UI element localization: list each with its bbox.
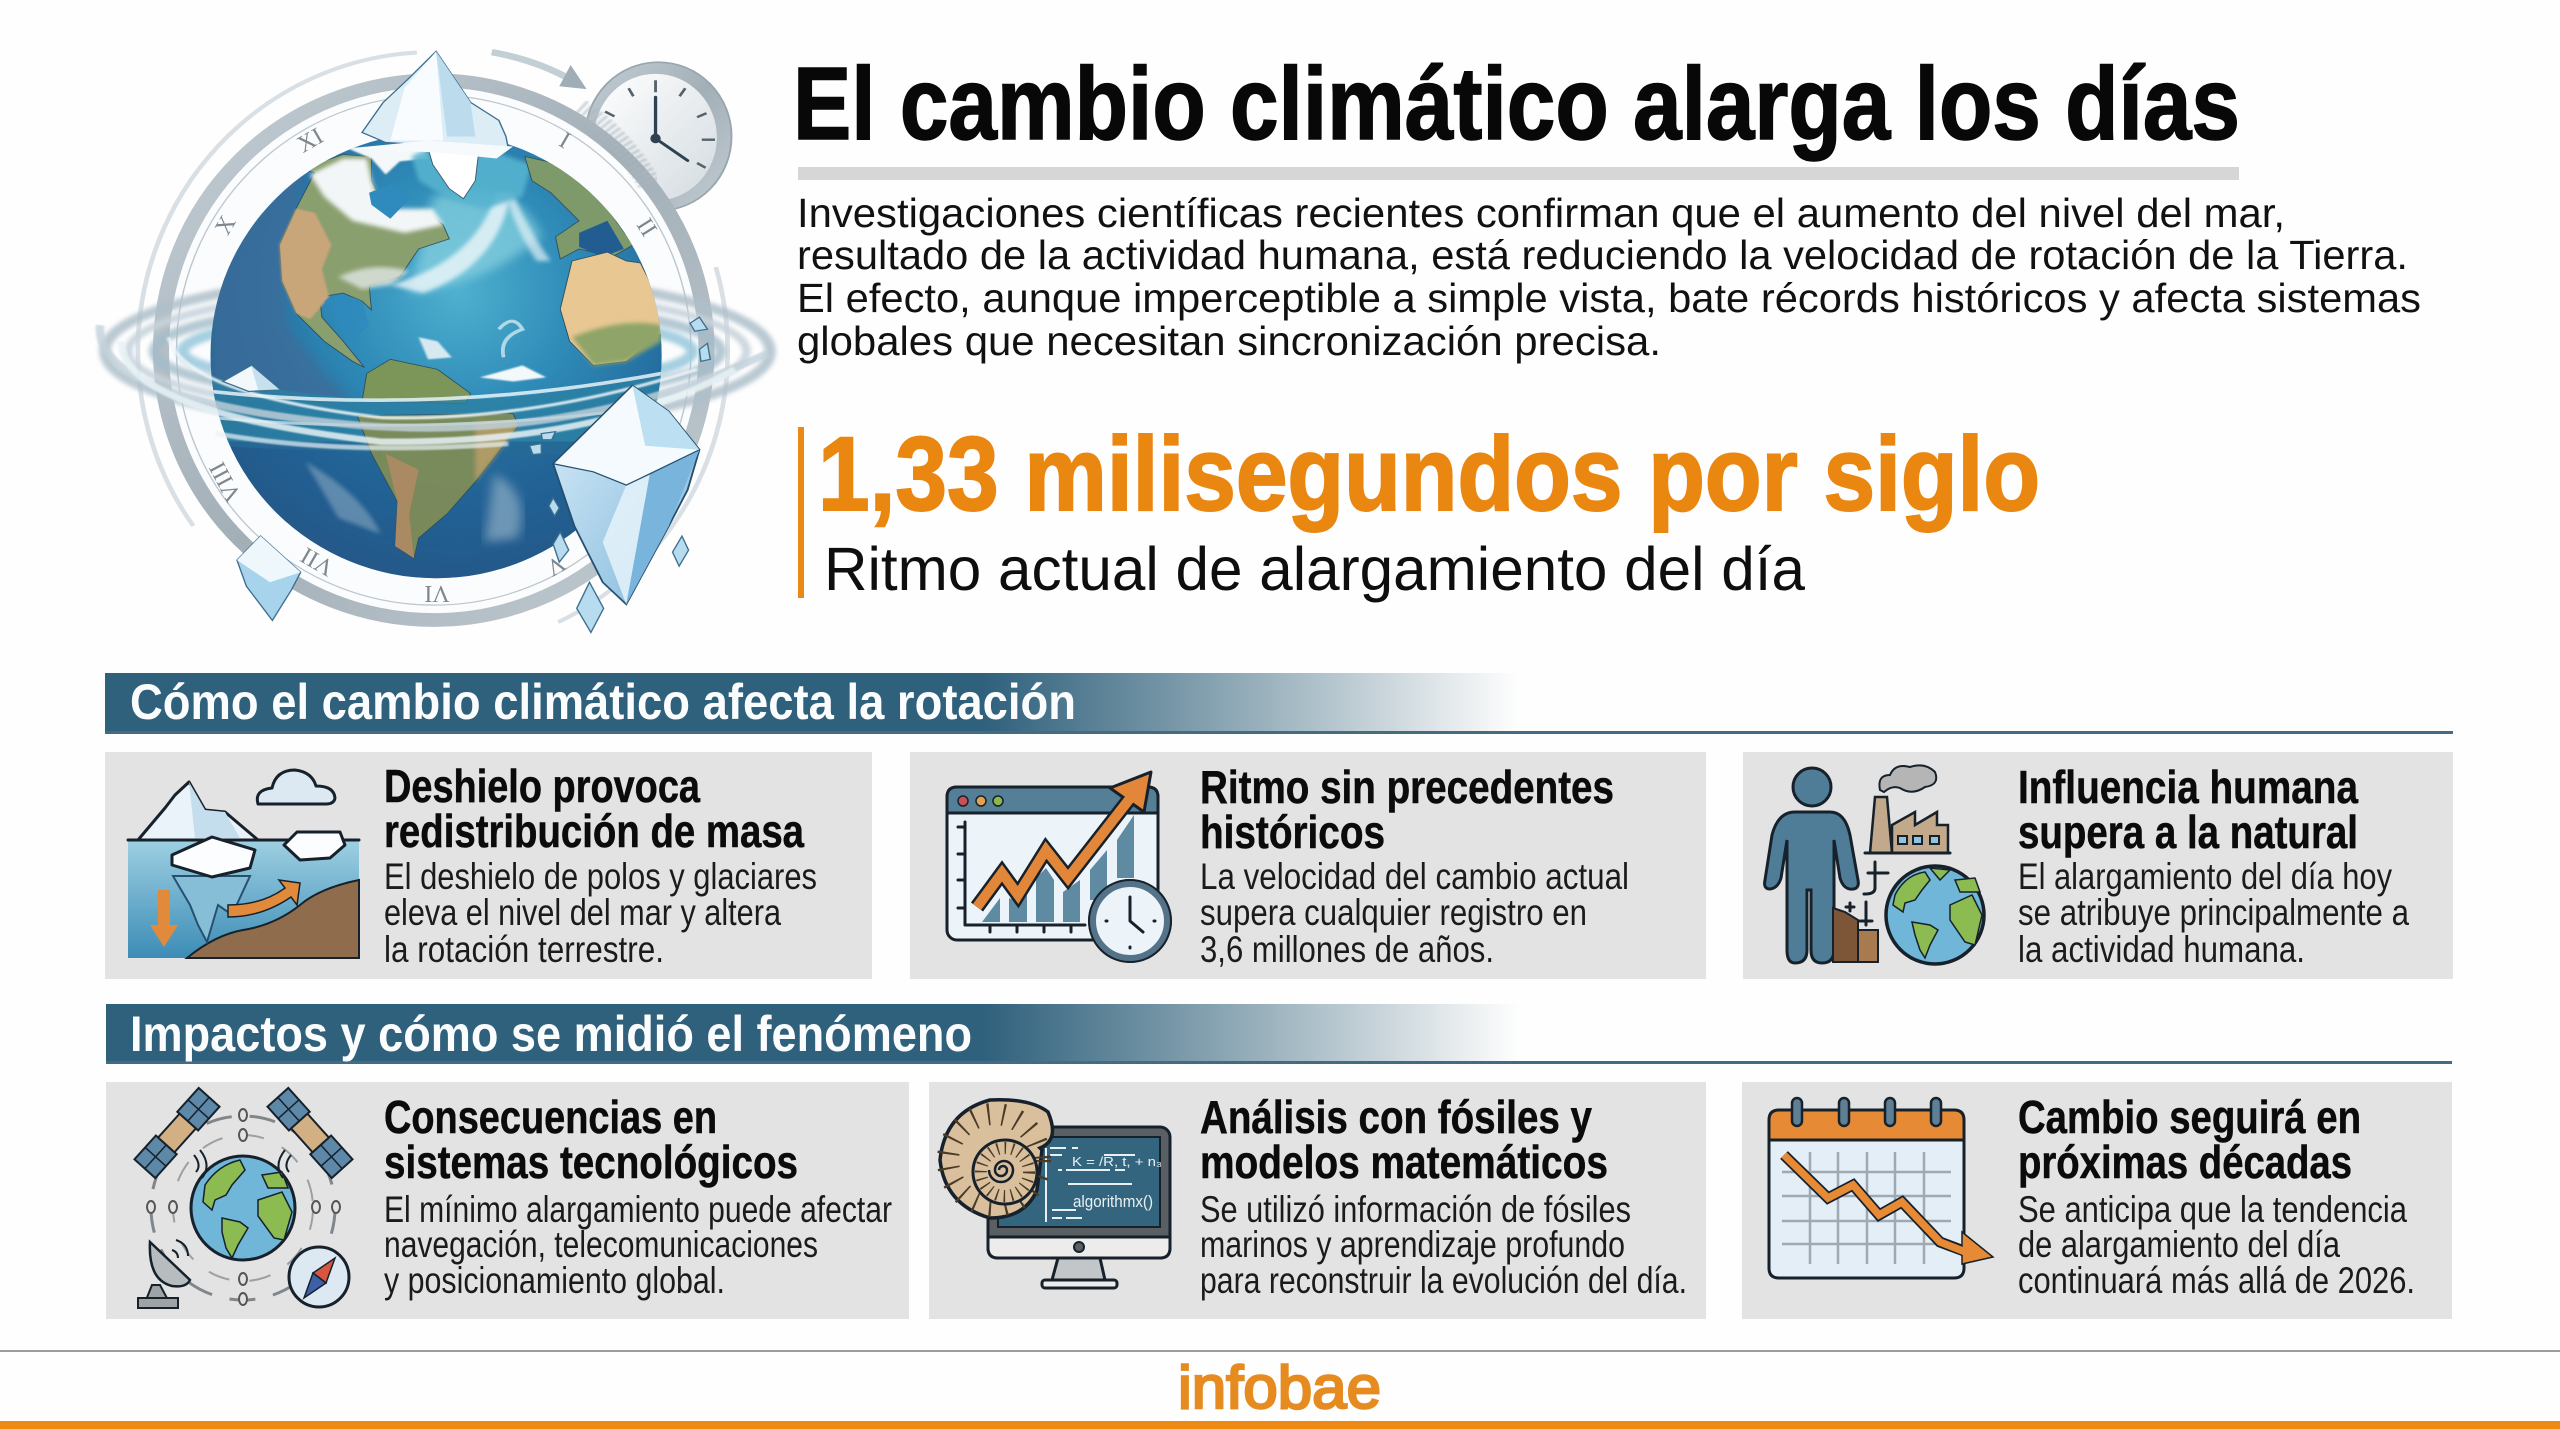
- panel body: 3,6 millones de años.: [1200, 929, 1494, 970]
- panel: consecuencias: [106, 1082, 909, 1319]
- panel heading: Análisis con fósiles y: [1200, 1091, 1592, 1143]
- panel body: de alargamiento del día: [2018, 1224, 2340, 1265]
- iceberg: large foreground: [553, 385, 699, 604]
- panel body: [384, 856, 817, 970]
- panel body: la actividad humana.: [2018, 929, 2305, 970]
- panel body: navegación, telecomunicaciones: [384, 1224, 818, 1265]
- clock numerals: XI: [293, 123, 328, 158]
- africa: [560, 252, 662, 365]
- icon: satellites, earth, dish and compass: [134, 1088, 353, 1308]
- key figure callout: [798, 416, 2040, 603]
- key number: 1,33 milisegundos por siglo: [818, 416, 2040, 533]
- clock numerals: V: [541, 550, 570, 581]
- iceberg: small floating left: [223, 365, 279, 391]
- accent bar: [798, 427, 804, 598]
- panel body: El mínimo alargamiento puede afectar: [384, 1189, 892, 1230]
- intro paragraph: resultado de la actividad humana, está reduciendo la velocidad de rotación de la Tierra.: [797, 232, 2408, 278]
- panel heading: [2018, 1091, 2361, 1188]
- panel heading: Cambio seguirá en: [2018, 1091, 2361, 1143]
- clock numerals: II: [631, 214, 661, 241]
- footer divider: [0, 1350, 2560, 1352]
- key number caption: Ritmo actual de alargamiento del día: [824, 535, 1805, 603]
- section header: rotation: [105, 673, 2453, 734]
- panel body: se atribuye principalmente a: [2018, 892, 2409, 933]
- intro paragraph: globales que necesitan sincronización precisa.: [797, 318, 1661, 364]
- south america below water: [357, 414, 519, 559]
- panel heading: históricos: [1200, 806, 1385, 858]
- panel heading: Deshielo provoca: [384, 760, 700, 812]
- clock numerals: [205, 123, 661, 606]
- panel heading: modelos matemáticos: [1200, 1136, 1608, 1188]
- title: El cambio climático alarga los días: [793, 46, 2240, 161]
- section header: impacts: [106, 1004, 2452, 1064]
- panel heading: redistribución de masa: [384, 805, 804, 857]
- icon: melting ice and sea: [128, 770, 359, 958]
- south america above water: [362, 359, 471, 404]
- clock numerals: I: [555, 128, 574, 154]
- panel heading: [2018, 761, 2358, 858]
- panel: ritmo: [910, 752, 1706, 979]
- iceberg: top: [348, 51, 513, 159]
- rings of water in front of globe: [100, 325, 768, 448]
- panel body: El deshielo de polos y glaciares: [384, 856, 817, 897]
- panel heading: Ritmo sin precedentes: [1200, 761, 1614, 813]
- sea level water band: [211, 373, 664, 455]
- panel body: para reconstruir la evolución del día.: [1200, 1260, 1687, 1301]
- clock numerals: VII: [297, 542, 338, 581]
- icon: ammonite fossil and computer monitor: algorithmx(): [1073, 1192, 1153, 1211]
- clock numerals: VI: [424, 580, 450, 606]
- panel heading: [384, 1091, 798, 1188]
- panel heading: próximas décadas: [2018, 1136, 2352, 1188]
- panel body: y posicionamiento global.: [384, 1260, 725, 1301]
- north america: [279, 155, 449, 367]
- panel body: continuará más allá de 2026.: [2018, 1260, 2415, 1301]
- illustration: Earth globe with clock and icebergs: [100, 51, 770, 651]
- icon: ammonite fossil and computer monitor: K = /R, t, + n₃: [1072, 1154, 1162, 1169]
- section header: impacts: Impactos y cómo se midió el fenómeno: [130, 1006, 972, 1062]
- clock numerals: VIII: [205, 457, 247, 506]
- icon: calendar with falling trend: [1769, 1098, 1993, 1278]
- icon: rising chart with clock: [947, 772, 1171, 962]
- panel body: [1200, 1189, 1687, 1301]
- panel heading: supera a la natural: [2018, 806, 2358, 858]
- europe: [525, 157, 633, 259]
- arrow: rotation swoosh: [492, 52, 587, 89]
- panel body: marinos y aprendizaje profundo: [1200, 1224, 1625, 1265]
- rings of water behind globe: [105, 275, 770, 428]
- clock ring: [138, 52, 728, 651]
- iceberg: small lower left: [237, 536, 301, 620]
- intro paragraph: [797, 190, 2421, 364]
- panel body: la rotación terrestre.: [384, 929, 664, 970]
- panel heading: Consecuencias en: [384, 1091, 717, 1143]
- panel body: La velocidad del cambio actual: [1200, 856, 1629, 897]
- icon: ammonite fossil and computer monitor: [940, 1100, 1170, 1288]
- panel: fósiles: [929, 1082, 1706, 1319]
- panel heading: [1200, 1091, 1608, 1188]
- icon: small wall clock: [585, 62, 732, 211]
- intro paragraph: El efecto, aunque imperceptible a simple vista, bate récords históricos y afecta sistemas: [797, 275, 2421, 321]
- icon: person, factory and earth: [1765, 765, 1984, 964]
- section header: rotation: Cómo el cambio climático afecta la rotación: [130, 674, 1076, 730]
- clock numerals: X: [210, 211, 241, 240]
- globe: oceans and continents: [211, 132, 664, 582]
- panel heading: sistemas tecnológicos: [384, 1136, 798, 1188]
- ice shards: [530, 317, 710, 632]
- panel body: eleva el nivel del mar y altera: [384, 892, 781, 933]
- panel body: Se anticipa que la tendencia: [2018, 1189, 2407, 1230]
- panel heading: [384, 760, 804, 857]
- panel: influencia humana: [1743, 752, 2453, 979]
- intro paragraph: Investigaciones científicas recientes confirman que el aumento del nivel del mar,: [797, 190, 2285, 236]
- panel body: [1200, 856, 1629, 970]
- panel heading: [1200, 761, 1614, 858]
- title underline: [798, 167, 2239, 180]
- panel body: [2018, 1189, 2415, 1301]
- logo: infobae: infobae: [1178, 1354, 1381, 1421]
- panel body: Se utilizó información de fósiles: [1200, 1189, 1631, 1230]
- panel body: El alargamiento del día hoy: [2018, 856, 2392, 897]
- panel: próximas décadas: [1742, 1082, 2452, 1319]
- panel: deshielo: [105, 752, 872, 979]
- panel heading: Influencia humana: [2018, 761, 2358, 813]
- panel body: supera cualquier registro en: [1200, 892, 1587, 933]
- panel body: [2018, 856, 2409, 970]
- panel body: [384, 1189, 892, 1301]
- footer orange band: [0, 1421, 2560, 1429]
